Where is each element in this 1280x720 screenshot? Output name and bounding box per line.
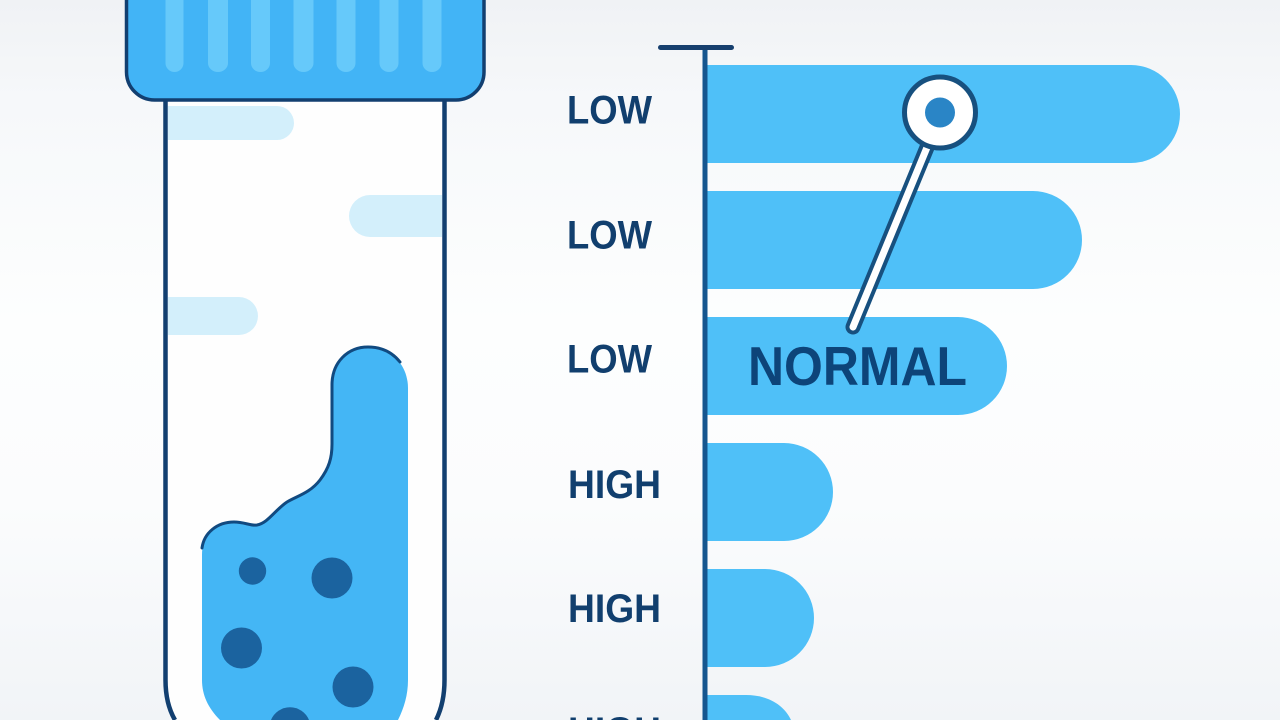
cap xyxy=(126,0,484,100)
normal label: NORMAL xyxy=(748,335,967,397)
marker pin xyxy=(853,77,976,327)
liquid xyxy=(202,347,408,720)
row labels: LOW xyxy=(567,214,652,258)
highlight blobs on glass xyxy=(168,106,442,335)
tube body xyxy=(166,95,444,720)
row labels: LOW xyxy=(567,88,652,132)
row labels: HIGH xyxy=(568,587,661,631)
level chart xyxy=(567,45,1180,720)
row labels: LOW xyxy=(567,338,652,382)
row labels xyxy=(567,88,661,720)
row labels: HIGH xyxy=(568,463,661,507)
bars xyxy=(707,65,1180,720)
particles xyxy=(221,557,374,720)
axis xyxy=(658,45,734,720)
test tube xyxy=(126,0,484,720)
